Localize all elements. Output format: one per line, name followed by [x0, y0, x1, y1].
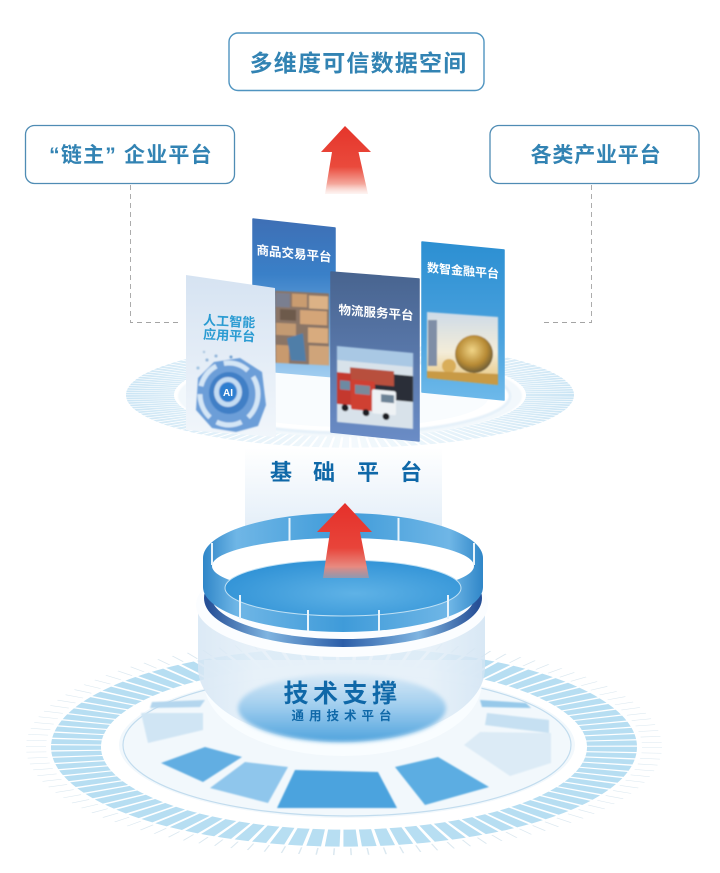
dashed connector left	[130, 185, 181, 322]
arrow: lower red arrow	[317, 503, 372, 578]
base cylinder	[198, 600, 485, 756]
right box: industry platforms: 各类产业平台	[531, 143, 661, 167]
left box: chain leader enterprise platform	[26, 126, 234, 184]
left box: chain leader enterprise platform: “链主” 企业平台	[49, 143, 213, 167]
card title: 人工智能	[203, 313, 256, 330]
top ring assembly	[196, 513, 488, 657]
card title: 商品交易平台	[257, 242, 331, 265]
card: data finance platform	[422, 242, 504, 400]
base plate	[116, 669, 578, 821]
ring interior	[212, 538, 474, 594]
label: basic platform	[270, 460, 422, 485]
blue face	[225, 560, 461, 616]
separators	[212, 518, 474, 631]
photo: golden globe	[427, 312, 498, 385]
cylinder foot rim	[204, 660, 482, 756]
photo: trucks at port	[337, 346, 413, 429]
lower radial disc	[36, 642, 652, 852]
card: commodity trading platform	[253, 219, 335, 377]
light column behind label	[245, 448, 442, 530]
faint outer ticks	[36, 642, 652, 852]
dark lower ring	[208, 553, 478, 643]
label: basic platform: 平	[357, 460, 379, 485]
top box: multidimensional trusted data space	[229, 33, 484, 90]
upper radial disc	[150, 348, 550, 442]
card title: 数智金融平台	[427, 260, 499, 281]
tick ring	[76, 656, 612, 838]
card: logistics service platform	[331, 272, 419, 441]
card: AI application platform	[186, 275, 276, 437]
arrow: upper red arrow	[321, 126, 371, 194]
blue ring band	[203, 513, 483, 632]
label: technical support	[283, 680, 402, 723]
label: technical support: 技术支撑	[283, 680, 402, 708]
card title: 物流服务平台	[339, 302, 413, 323]
sublabel: general technology platform: 通用技术平台	[291, 708, 397, 723]
label: basic platform: 基	[270, 460, 292, 485]
card subtitle: 应用平台	[203, 327, 256, 344]
inner blue glow	[238, 674, 446, 742]
dashed connector right	[541, 185, 592, 322]
card: AI application platform: AI	[223, 388, 233, 399]
top box: multidimensional trusted data space: 多维度可信数据空间	[250, 50, 467, 76]
label: basic platform: 础	[313, 460, 335, 485]
icon: AI emblem	[196, 351, 266, 432]
cylinder body	[198, 600, 485, 742]
photo: stacked cartons	[275, 291, 329, 365]
white collar	[196, 553, 488, 657]
right box: industry platforms	[490, 126, 699, 184]
panels of the plate	[141, 700, 551, 808]
label: basic platform: 台	[400, 460, 422, 485]
